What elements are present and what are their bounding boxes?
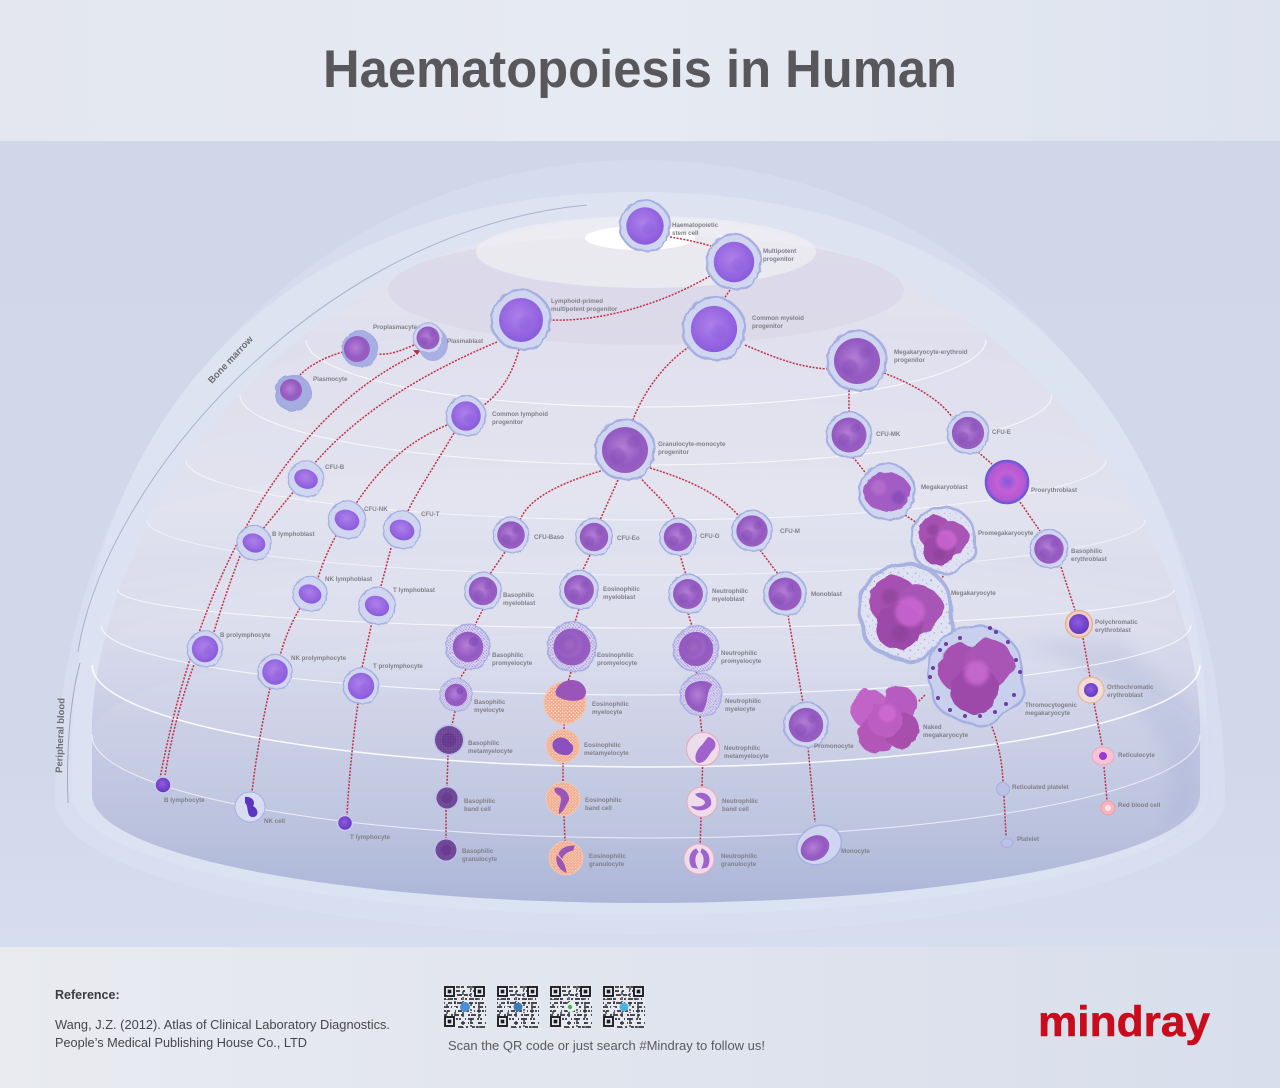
cell: plasmablast: Plasmablast bbox=[447, 338, 483, 345]
cell: neutrophilic promyelocyte bbox=[673, 626, 762, 672]
cell: basophilic granulocyte: Basophilic bbox=[462, 848, 493, 855]
annotation: peripheral blood bracket: Peripheral blood bbox=[54, 698, 68, 773]
cell: multipotent progenitor: Multipotent bbox=[763, 248, 796, 255]
cell: proplasmacyte bbox=[342, 324, 418, 367]
cell: T prolymphocyte: T prolymphocyte bbox=[373, 663, 423, 670]
cell: CFU-T: CFU-T bbox=[421, 511, 440, 518]
cell: neutrophilic granulocyte: granulocyte bbox=[721, 861, 757, 868]
cell: CFU-Eo bbox=[576, 519, 640, 555]
cell: granulocyte-monocyte progenitor: progenitor bbox=[658, 449, 690, 456]
cell: neutrophilic band cell: Neutrophilic bbox=[722, 798, 758, 805]
cell: common lymphoid progenitor: Common lymphoid bbox=[492, 411, 548, 418]
logo: mindray: mindray bbox=[1038, 998, 1210, 1046]
cell: megakaryoblast: Megakaryoblast bbox=[921, 484, 968, 491]
cell: CFU-G bbox=[660, 519, 720, 555]
cell: basophilic myeloblast: myeloblast bbox=[503, 600, 535, 607]
cell: CFU-G: CFU-G bbox=[700, 533, 720, 540]
cell: haematopoietic stem cell: Haematopoietic bbox=[672, 222, 718, 229]
cell: common myeloid progenitor: progenitor bbox=[752, 323, 784, 330]
cell: red blood cell: Red blood cell bbox=[1118, 802, 1161, 809]
footer band bbox=[0, 947, 1280, 1088]
cell: thrombocytogenic megakaryocyte: Thromocytogenic bbox=[1025, 702, 1077, 709]
cell: CFU-E bbox=[947, 412, 1011, 454]
cell: orthochromatic erythroblast: Orthochromatic bbox=[1107, 684, 1153, 691]
cell: megakaryoblast bbox=[859, 464, 968, 520]
cell: neutrophilic band cell: band cell bbox=[722, 806, 749, 813]
reference text: People’s Medical Publishing House Co., LTD bbox=[55, 1036, 307, 1050]
title: Haematopoiesis in Human bbox=[323, 40, 957, 99]
QR code: WeChat bbox=[550, 986, 592, 1028]
cell: T prolymphocyte bbox=[343, 663, 423, 704]
cell: T lymphocyte: T lymphocyte bbox=[350, 834, 390, 841]
cell: polychromatic erythroblast bbox=[1066, 610, 1138, 638]
cell: naked megakaryocyte: megakaryocyte bbox=[923, 732, 969, 739]
cell: B lymphocyte: B lymphocyte bbox=[164, 797, 205, 804]
cell: plasmocyte: Plasmocyte bbox=[313, 376, 348, 383]
cell: promegakaryocyte: Promegakaryocyte bbox=[978, 530, 1034, 537]
cell: eosinophilic promyelocyte: promyelocyte bbox=[597, 660, 638, 667]
cell: CFU-M bbox=[732, 511, 800, 551]
cell: B lymphocyte bbox=[154, 776, 205, 804]
cell: basophilic metamyelocyte bbox=[433, 724, 513, 756]
cell: neutrophilic myelocyte: Neutrophilic bbox=[725, 698, 761, 705]
arrowhead bbox=[413, 350, 421, 355]
cell: proplasmacyte: Proplasmacyte bbox=[373, 324, 418, 331]
cell: NK prolymphocyte: NK prolymphocyte bbox=[291, 655, 347, 662]
cell: eosinophilic granulocyte: Eosinophilic bbox=[589, 853, 626, 860]
cell: eosinophilic metamyelocyte bbox=[546, 729, 629, 763]
cell: basophilic myelocyte: Basophilic bbox=[474, 699, 505, 706]
cell: basophilic metamyelocyte: metamyelocyte bbox=[468, 748, 513, 755]
cell: NK cell bbox=[235, 792, 285, 825]
cell: plasmablast bbox=[413, 323, 483, 361]
cell: polychromatic erythroblast: Polychromatic bbox=[1095, 619, 1138, 626]
cell: neutrophilic promyelocyte: promyelocyte bbox=[721, 658, 762, 665]
cell: B prolymphocyte: B prolymphocyte bbox=[220, 632, 271, 639]
cell: reticulocyte bbox=[1092, 747, 1155, 765]
cell: CFU-B: CFU-B bbox=[325, 464, 345, 471]
cell: B lymphoblast bbox=[237, 526, 315, 560]
cell: B lymphoblast: B lymphoblast bbox=[272, 531, 315, 538]
reference text bbox=[55, 988, 390, 1050]
cell: basophilic erythroblast bbox=[1030, 530, 1107, 568]
cell: reticulated platelet bbox=[996, 782, 1069, 796]
cell: basophilic promyelocyte bbox=[446, 625, 533, 669]
cell: basophilic erythroblast: erythroblast bbox=[1071, 556, 1107, 563]
cell: lymphoid-primed multipotent progenitor: Lymphoid-primed bbox=[551, 298, 603, 305]
cell: NK lymphoblast: NK lymphoblast bbox=[325, 576, 372, 583]
cell: neutrophilic band cell bbox=[687, 787, 759, 817]
cell: eosinophilic myelocyte: Eosinophilic bbox=[592, 701, 629, 708]
annotation: bone marrow bracket bbox=[78, 205, 587, 652]
cell: megakaryocyte-erythroid progenitor: Megakaryocyte-erythroid bbox=[894, 349, 968, 356]
cell: naked megakaryocyte bbox=[850, 687, 969, 753]
cell: basophilic myeloblast: Basophilic bbox=[503, 592, 534, 599]
reference text: Wang, J.Z. (2012). Atlas of Clinical Laboratory Diagnostics. bbox=[55, 1018, 390, 1032]
cell: CFU-NK bbox=[328, 501, 388, 539]
cell: common lymphoid progenitor bbox=[446, 396, 548, 436]
cell: CFU-B bbox=[288, 461, 345, 497]
cell: granulocyte-monocyte progenitor: Granulocyte-monocyte bbox=[658, 441, 725, 448]
cell: eosinophilic granulocyte: granulocyte bbox=[589, 861, 625, 868]
QR caption: Scan the QR code or just search #Mindray to follow us! bbox=[448, 1038, 765, 1053]
cell: basophilic promyelocyte: Basophilic bbox=[492, 652, 523, 659]
cell: eosinophilic myelocyte bbox=[544, 680, 629, 724]
cell: neutrophilic metamyelocyte: metamyelocyte bbox=[724, 753, 769, 760]
cell: haematopoietic stem cell: stem cell bbox=[672, 230, 699, 237]
cell: megakaryocyte bbox=[857, 564, 996, 660]
cell: basophilic promyelocyte: promyelocyte bbox=[492, 660, 533, 667]
cell: basophilic granulocyte bbox=[434, 838, 498, 863]
cell: neutrophilic granulocyte bbox=[684, 844, 758, 874]
cell: CFU-MK bbox=[827, 413, 901, 457]
cell: neutrophilic myelocyte bbox=[680, 674, 762, 716]
cell: platelet bbox=[1001, 836, 1039, 848]
cell: CFU-Baso: CFU-Baso bbox=[534, 534, 564, 541]
cell: basophilic metamyelocyte: Basophilic bbox=[468, 740, 499, 747]
cell: reticulocyte: Reticulocyte bbox=[1118, 752, 1155, 759]
cell: monoblast bbox=[764, 573, 842, 615]
cell: common myeloid progenitor bbox=[683, 298, 804, 360]
cell: T lymphocyte bbox=[337, 815, 390, 841]
cell: basophilic myelocyte bbox=[440, 679, 506, 714]
cell: neutrophilic granulocyte: Neutrophilic bbox=[721, 853, 757, 860]
cell: naked megakaryocyte: Naked bbox=[923, 724, 942, 731]
cell: platelet: Platelet bbox=[1017, 836, 1039, 843]
cell: megakaryocyte-erythroid progenitor bbox=[828, 332, 968, 390]
cell: neutrophilic metamyelocyte: Neutrophilic bbox=[724, 745, 760, 752]
cell: eosinophilic myeloblast bbox=[560, 571, 640, 609]
QR code: LinkedIn bbox=[497, 986, 539, 1028]
cell: red blood cell bbox=[1101, 801, 1161, 815]
cell: reticulated platelet: Reticulated platelet bbox=[1012, 784, 1069, 791]
cell: basophilic myeloblast bbox=[465, 573, 535, 609]
cell: NK prolymphocyte bbox=[258, 655, 347, 689]
header band bbox=[0, 0, 1280, 141]
cell: common lymphoid progenitor: progenitor bbox=[492, 419, 524, 426]
cell: common myeloid progenitor: Common myeloid bbox=[752, 315, 804, 322]
cell: monocyte bbox=[790, 818, 870, 872]
cell: promonocyte bbox=[784, 703, 854, 750]
cell: plasmocyte bbox=[275, 375, 348, 411]
cell: eosinophilic myeloblast: Eosinophilic bbox=[603, 586, 640, 593]
cell: neutrophilic promyelocyte: Neutrophilic bbox=[721, 650, 757, 657]
cell: neutrophilic myelocyte: myelocyte bbox=[725, 706, 756, 713]
cell: megakaryocyte-erythroid progenitor: progenitor bbox=[894, 357, 926, 364]
panel: dome background bbox=[0, 141, 1280, 948]
cell: eosinophilic myelocyte: myelocyte bbox=[592, 709, 623, 716]
reference text: Reference: bbox=[55, 988, 120, 1002]
cell: neutrophilic myeloblast: Neutrophilic bbox=[712, 588, 748, 595]
cell: eosinophilic metamyelocyte: metamyelocyte bbox=[584, 750, 629, 757]
cell: promonocyte: Promonocyte bbox=[814, 743, 854, 750]
cell: lymphoid-primed multipotent progenitor: multipotent progenitor bbox=[551, 306, 618, 313]
QR code: Facebook bbox=[444, 986, 486, 1028]
cell: neutrophilic myeloblast bbox=[669, 575, 749, 613]
cell: eosinophilic band cell bbox=[546, 782, 622, 816]
cell: neutrophilic myeloblast: myeloblast bbox=[712, 596, 744, 603]
cell: eosinophilic promyelocyte: Eosinophilic bbox=[597, 652, 634, 659]
cell: multipotent progenitor bbox=[707, 235, 796, 289]
cell: basophilic band cell: Basophilic bbox=[464, 798, 495, 805]
cell: CFU-E: CFU-E bbox=[992, 429, 1011, 436]
QR code: Twitter bbox=[603, 986, 645, 1028]
cell: eosinophilic band cell: Eosinophilic bbox=[585, 797, 622, 804]
cell: CFU-T bbox=[383, 511, 440, 549]
cell: neutrophilic metamyelocyte bbox=[686, 732, 769, 766]
cell: haematopoietic stem cell bbox=[620, 201, 719, 251]
cell: basophilic granulocyte: granulocyte bbox=[462, 856, 498, 863]
cell: CFU-M: CFU-M bbox=[780, 528, 800, 535]
cell: orthochromatic erythroblast bbox=[1078, 677, 1154, 703]
connectors: differentiation paths bbox=[160, 237, 1107, 850]
cell: eosinophilic myeloblast: myeloblast bbox=[603, 594, 635, 601]
cell: CFU-Baso bbox=[493, 517, 564, 553]
cell: basophilic erythroblast: Basophilic bbox=[1071, 548, 1102, 555]
cell: basophilic band cell bbox=[435, 786, 496, 813]
cell: proerythroblast: Proerythroblast bbox=[1031, 487, 1077, 494]
annotation: bone marrow bracket: Bone marrow bbox=[206, 334, 256, 386]
cell: monoblast: Monoblast bbox=[811, 591, 842, 598]
cell: CFU-Eo: CFU-Eo bbox=[617, 535, 640, 542]
cell: eosinophilic granulocyte bbox=[549, 841, 626, 875]
cell: NK lymphoblast bbox=[293, 576, 372, 611]
cell: lymphoid-primed multipotent progenitor bbox=[492, 290, 618, 350]
cell: CFU-MK: CFU-MK bbox=[876, 431, 901, 438]
cell: multipotent progenitor: progenitor bbox=[763, 256, 795, 263]
cell: polychromatic erythroblast: erythroblast bbox=[1095, 627, 1131, 634]
cell: B prolymphocyte bbox=[187, 631, 271, 667]
cell: T lymphoblast: T lymphoblast bbox=[393, 587, 435, 594]
cell: NK cell: NK cell bbox=[264, 818, 285, 825]
cell: eosinophilic band cell: band cell bbox=[585, 805, 612, 812]
cell: granulocyte-monocyte progenitor bbox=[596, 420, 726, 480]
cell: promegakaryocyte bbox=[910, 507, 1034, 573]
cell: proerythroblast bbox=[986, 460, 1077, 504]
cell: megakaryocyte: Megakaryocyte bbox=[951, 590, 996, 597]
cell: eosinophilic metamyelocyte: Eosinophilic bbox=[584, 742, 621, 749]
cell: T lymphoblast bbox=[359, 587, 435, 624]
cell: eosinophilic promyelocyte bbox=[548, 623, 638, 671]
cell: basophilic myelocyte: myelocyte bbox=[474, 707, 505, 714]
cell: CFU-NK: CFU-NK bbox=[364, 506, 388, 513]
cell: basophilic band cell: band cell bbox=[464, 806, 491, 813]
cell: monocyte: Monocyte bbox=[841, 848, 870, 855]
cell: thrombocytogenic megakaryocyte bbox=[926, 626, 1077, 724]
cell: orthochromatic erythroblast: erythroblast bbox=[1107, 692, 1143, 699]
annotation: peripheral blood bracket bbox=[54, 663, 80, 803]
cell: thrombocytogenic megakaryocyte: megakaryocyte bbox=[1025, 710, 1071, 717]
